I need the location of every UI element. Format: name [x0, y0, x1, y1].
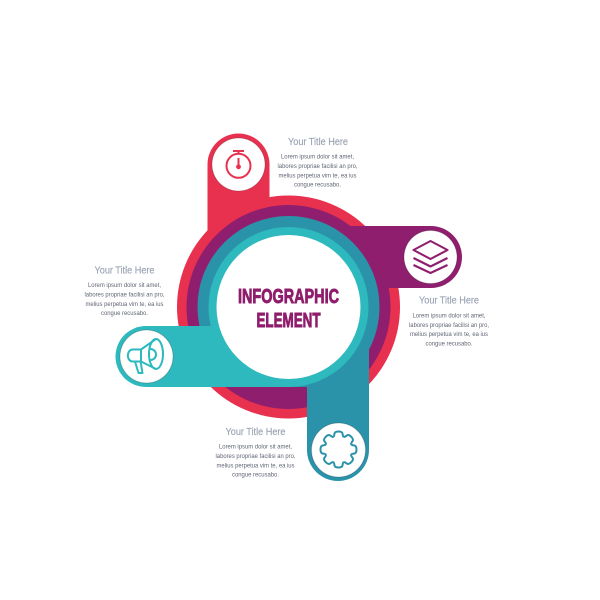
text block: top right: melius perpetua vim te, ea ius — [278, 172, 357, 180]
icon: gear — [312, 423, 366, 477]
text block: top right: labores propriae facilisi an pro, — [278, 163, 358, 170]
heading: infographic element: ELEMENT — [256, 309, 321, 332]
text block: bottom: labores propriae facilisi an pro, — [216, 453, 296, 460]
text block: left: Lorem ipsum dolor sit amet, — [88, 282, 161, 289]
text block: left: Your Title Here — [94, 266, 155, 276]
tab: red stopwatch tab — [208, 133, 270, 280]
text block: right: Lorem ipsum dolor sit amet, — [412, 312, 486, 320]
tab: purple layers tab — [300, 226, 462, 288]
tab: teal megaphone tab — [115, 326, 290, 387]
text block: left: labores propriae facilisi an pro, — [84, 292, 165, 298]
ring: purple — [186, 205, 390, 409]
heading: infographic element — [238, 285, 339, 332]
text block: right: congue recusabo. — [426, 340, 473, 348]
text block: bottom: melius perpetua vim te, ea ius — [216, 462, 295, 470]
center white circle — [216, 235, 360, 379]
panel: central ring and tabs — [115, 133, 462, 481]
heading: infographic element: INFOGRAPHIC — [238, 285, 339, 308]
text block: right: labores propriae facilisi an pro, — [409, 322, 489, 329]
icon: stopwatch — [212, 138, 265, 191]
text block: bottom — [216, 427, 296, 478]
text block: top right: congue recusabo. — [294, 182, 341, 188]
ring: red outer — [177, 196, 400, 418]
text block: left: congue recusabo. — [101, 310, 148, 317]
icon: megaphone — [120, 330, 173, 383]
text block: right — [409, 296, 489, 348]
text block: right: melius perpetua vim te, ea ius — [410, 331, 489, 338]
text block: top right: Lorem ipsum dolor sit amet, — [281, 154, 354, 160]
text block: left: melius perpetua vim te, ea ius — [86, 301, 164, 308]
icon: layers — [404, 230, 457, 284]
text block: bottom: congue recusabo. — [232, 472, 279, 478]
tab: dark teal gear tab — [307, 330, 369, 481]
text block: bottom: Lorem ipsum dolor sit amet, — [219, 444, 292, 450]
text block: left — [84, 266, 165, 317]
text block: top right: Your Title Here — [288, 137, 348, 148]
ring: dark teal — [198, 216, 380, 398]
text block: right: Your Title Here — [419, 296, 479, 306]
text block: bottom: Your Title Here — [226, 427, 286, 438]
ring: teal — [208, 227, 368, 387]
text block: top right — [278, 137, 358, 188]
